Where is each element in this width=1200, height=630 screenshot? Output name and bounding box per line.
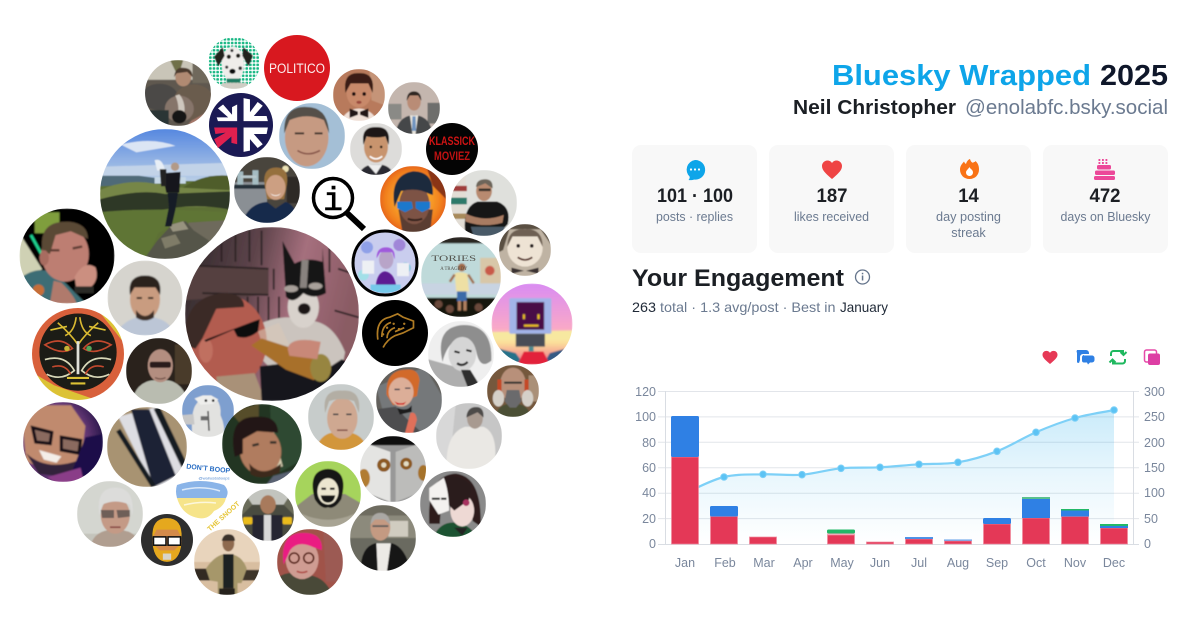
user name and handle: @enolabfc.bsky.social [965,96,1168,119]
right axis labels: 0 [1144,537,1151,551]
avatar: Politico logo: POLITICO [269,61,325,76]
month labels: Jul [911,556,927,570]
left axis labels: 40 [642,486,656,500]
engagement summary [632,299,888,315]
legend icon: replies bubbles [1077,350,1094,364]
chart: monthly engagement [635,385,1165,570]
month labels: Nov [1064,556,1087,570]
avatar: young girl black and white photo [499,224,551,276]
avatar: black and white man in white shirt [436,403,502,469]
engagement summary: total · 1.3 avg/post · Best in [660,299,836,315]
avatar: cartoon laughing face on green [295,461,361,527]
month labels: Sep [986,556,1008,570]
month labels: Dec [1103,556,1125,570]
avatar: curly-haired man [222,404,302,484]
avatar: man in respirator mask [487,365,539,417]
avatar: Don't Boop the Snoot Ukraine seal [176,464,242,533]
stat card: days on Bluesky [1043,145,1168,253]
left axis labels: 100 [635,410,656,424]
month labels [675,556,1125,570]
right axis labels: 50 [1144,512,1158,526]
avatar: Politico logo [264,35,330,101]
heading: Your Engagement: Your Engagement [632,265,844,292]
stat card: posts and replies: posts · replies [656,209,733,224]
left axis labels [635,385,656,551]
avatar: eyes peering over newspaper [358,436,429,502]
avatar: man on white gradient [350,123,402,175]
user name and handle: Neil Christopher [793,96,956,119]
stat card: posts and replies [632,145,757,253]
month labels: Mar [753,556,775,570]
right axis labels: 100 [1144,486,1165,500]
avatar: Klassick Moviez logo: MOVIEZ [434,149,470,163]
legend icon: quotes copy [1144,350,1160,365]
stat card: streak: streak [951,225,986,240]
avatar: woman with pink hair and glasses [277,529,343,595]
user name and handle [793,96,1168,119]
avatar: pink robot [492,284,572,364]
avatar: man in black t-shirt [451,170,517,236]
avatar: boy with bow tie [333,69,385,121]
avatar: anime character with mask [420,471,486,537]
left axis labels: 60 [642,461,656,475]
stat card: streak: 14 [958,186,979,207]
engagement summary: 263 [632,299,656,315]
avatar: green-man mandala [32,308,124,400]
right axis labels: 300 [1144,385,1165,399]
avatar: Don't Boop the Snoot Ukraine seal: @walrusdaboops [199,476,229,480]
avatar: blonde vintage actress [428,321,494,387]
right axis labels [1144,385,1165,551]
icon: cake [1094,159,1115,180]
month labels: Apr [793,556,813,570]
avatar: Don't Boop the Snoot Ukraine seal: DON'T BOOP [186,464,231,475]
replies bars [671,416,1128,541]
left axis labels: 80 [642,436,656,450]
chart legend [1042,350,1160,365]
avatar: Klassick Moviez logo: KLASSICK [429,134,475,148]
avatar: red-haired woman [376,367,442,433]
avatar: young man on pale background [108,260,182,336]
avatar: dalmatian on green dots [208,37,260,89]
stat card: likes [769,145,894,253]
legend icon: likes heart [1042,351,1058,364]
stat card: days on Bluesky: days on Bluesky [1060,209,1151,224]
icon: info [856,270,870,284]
left axis labels: 0 [649,537,656,551]
avatar: The Tories, A Tragedy stage: TORIES [431,253,476,263]
likes bars [672,457,1128,544]
stat card: streak: day posting [936,209,1001,224]
stat card: likes: 187 [816,186,848,207]
stat card: likes: likes received [794,209,869,224]
avatar: bald man with sunglasses [126,338,192,404]
left axis labels: 120 [635,385,656,399]
icon: speech bubble [687,160,705,180]
month labels: Jan [675,556,695,570]
avatar: man in grey suit [388,82,440,134]
title: 2025 [1100,60,1168,92]
avatar: white-haired woman with glasses [77,481,143,547]
cumulative area and line [685,407,1117,544]
stat card: posts and replies: 101 · 100 [657,186,733,207]
avatar: hiker on mountain [100,129,230,259]
avatar: action hero in flames [380,166,446,232]
avatar: laughing man with glasses [23,402,103,482]
avatar: gold leopard [362,300,428,366]
avatar: woman at Tower Bridge [234,157,300,223]
avatar: The Tories, A Tragedy stage [421,237,501,317]
right axis labels: 150 [1144,461,1165,475]
month labels: Aug [947,556,969,570]
engagement summary: January [840,299,888,315]
reposts bars [827,497,1128,534]
month labels: Jun [870,556,890,570]
legend icon: reposts arrows [1110,351,1126,364]
icon: heart [822,160,842,179]
avatar: sketched otter [182,385,234,437]
avatar: The Tories, A Tragedy stage: A TRAGEDY [440,267,468,272]
avatar: man in sunglasses drinking beer by cat mural [183,227,359,401]
avatar: grey-haired man in orange shirt [308,384,374,450]
avatar: cartoon man with glasses and beard [141,514,193,566]
left axis labels: 20 [642,512,656,526]
avatar: smiling man [279,103,345,169]
stat card: days on Bluesky: 472 [1090,186,1120,207]
icon: magnifying glass with i [314,178,364,229]
avatar: man in black jacket [350,505,416,571]
avatar: portrait in purple floral ring [353,231,417,295]
avatar: Klassick Moviez logo [426,123,478,175]
avatar: Don't Boop the Snoot Ukraine seal: THE SNOOT [206,500,242,533]
avatar: dark tie close-up [107,407,187,487]
month labels: Feb [714,556,736,570]
title: Bluesky Wrapped [832,60,1091,92]
right axis labels: 200 [1144,436,1165,450]
month labels: Oct [1026,556,1046,570]
icon: flame [960,159,979,179]
month labels: May [830,556,855,570]
grid lines [658,392,1139,519]
avatar: man in beige jacket [194,529,260,595]
right axis labels: 250 [1144,410,1165,424]
avatar: person with dog [141,60,214,126]
avatar: man resting chin on hand [19,208,114,304]
avatar cluster [19,35,572,595]
icon: magnifying glass with i: i [323,183,343,220]
avatar: union arrows logo [209,93,273,157]
avatar: Lego-style figure in suit [242,489,294,541]
stat card: streak [906,145,1031,253]
